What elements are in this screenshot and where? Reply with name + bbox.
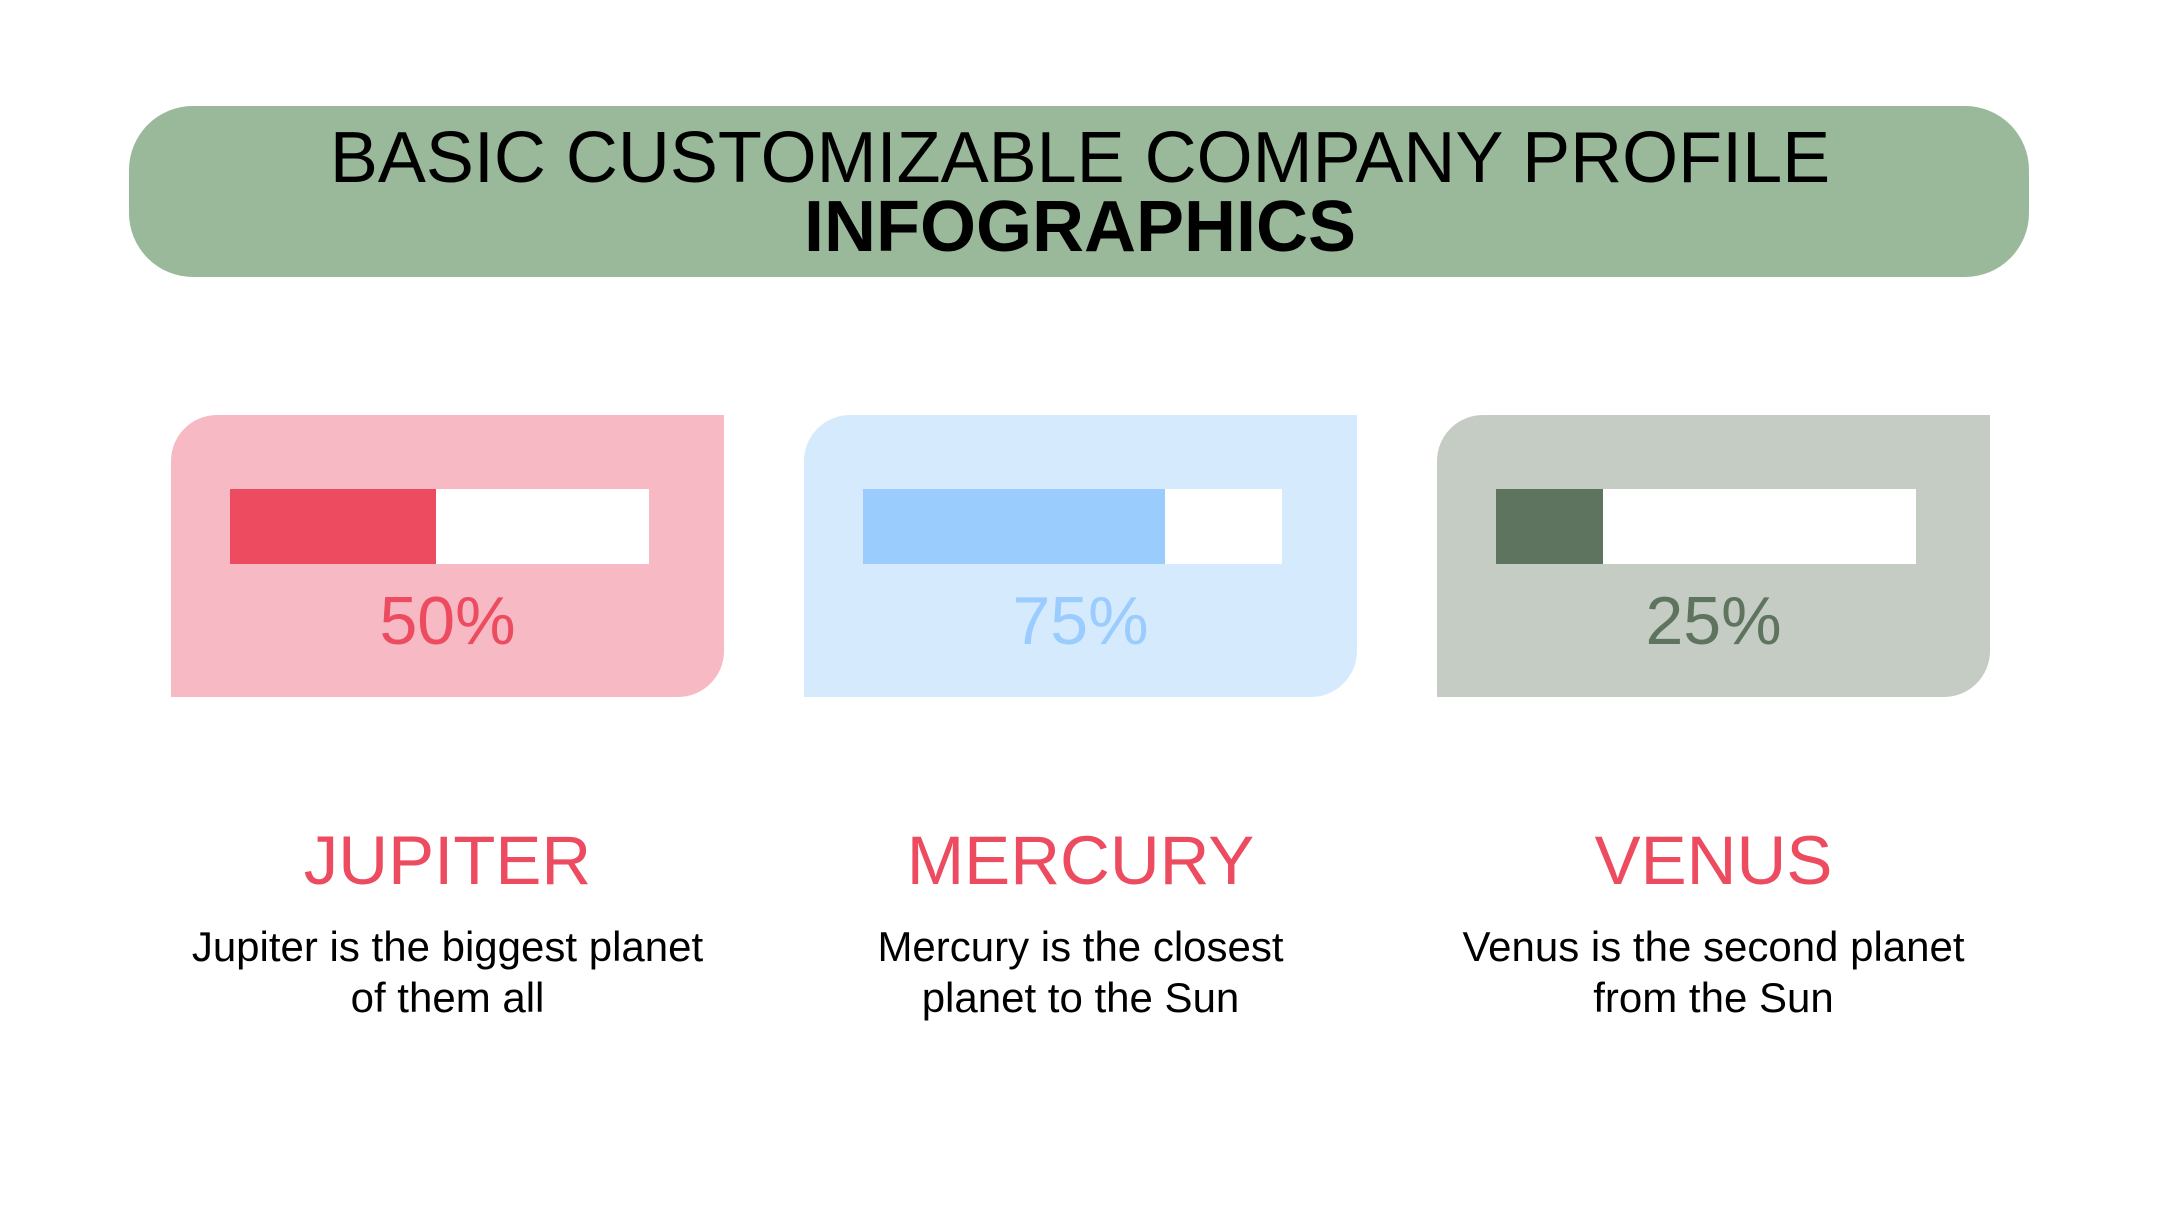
panel: Mercury progress [804, 415, 1357, 697]
description: Jupiter: of them all [351, 974, 544, 1021]
title line 2: INFOGRAPHICS [804, 187, 1356, 267]
description: Jupiter [192, 923, 703, 1021]
percentage: 50%: 50% [379, 583, 516, 659]
bar fill: 75% [863, 489, 1165, 564]
description: Mercury: Mercury is the closest [877, 923, 1284, 970]
panel: Venus progress [1437, 415, 1990, 697]
percentage: 75%: 75% [1012, 583, 1149, 659]
progress bar: Venus 25% [1496, 489, 1916, 564]
description: Jupiter: Jupiter is the biggest planet [192, 923, 703, 970]
description: Mercury [877, 923, 1284, 1021]
percentage: 25%: 25% [1645, 583, 1782, 659]
description: Mercury: planet to the Sun [922, 974, 1239, 1021]
progress bar: Jupiter 50% [230, 489, 649, 564]
title banner [129, 106, 2029, 277]
description: Venus [1462, 923, 1965, 1021]
bar fill: 50% [230, 489, 436, 564]
panel: Jupiter progress [171, 415, 724, 697]
bar fill: 25% [1496, 489, 1603, 564]
heading: Mercury: MERCURY [907, 822, 1254, 899]
heading: Venus: VENUS [1595, 822, 1832, 899]
description: Venus: Venus is the second planet [1462, 923, 1965, 970]
progress bar: Mercury 75% [863, 489, 1282, 564]
title line 1: BASIC CUSTOMIZABLE COMPANY PROFILE [330, 118, 1830, 198]
heading: Jupiter: JUPITER [304, 822, 591, 899]
description: Venus: from the Sun [1593, 974, 1834, 1021]
